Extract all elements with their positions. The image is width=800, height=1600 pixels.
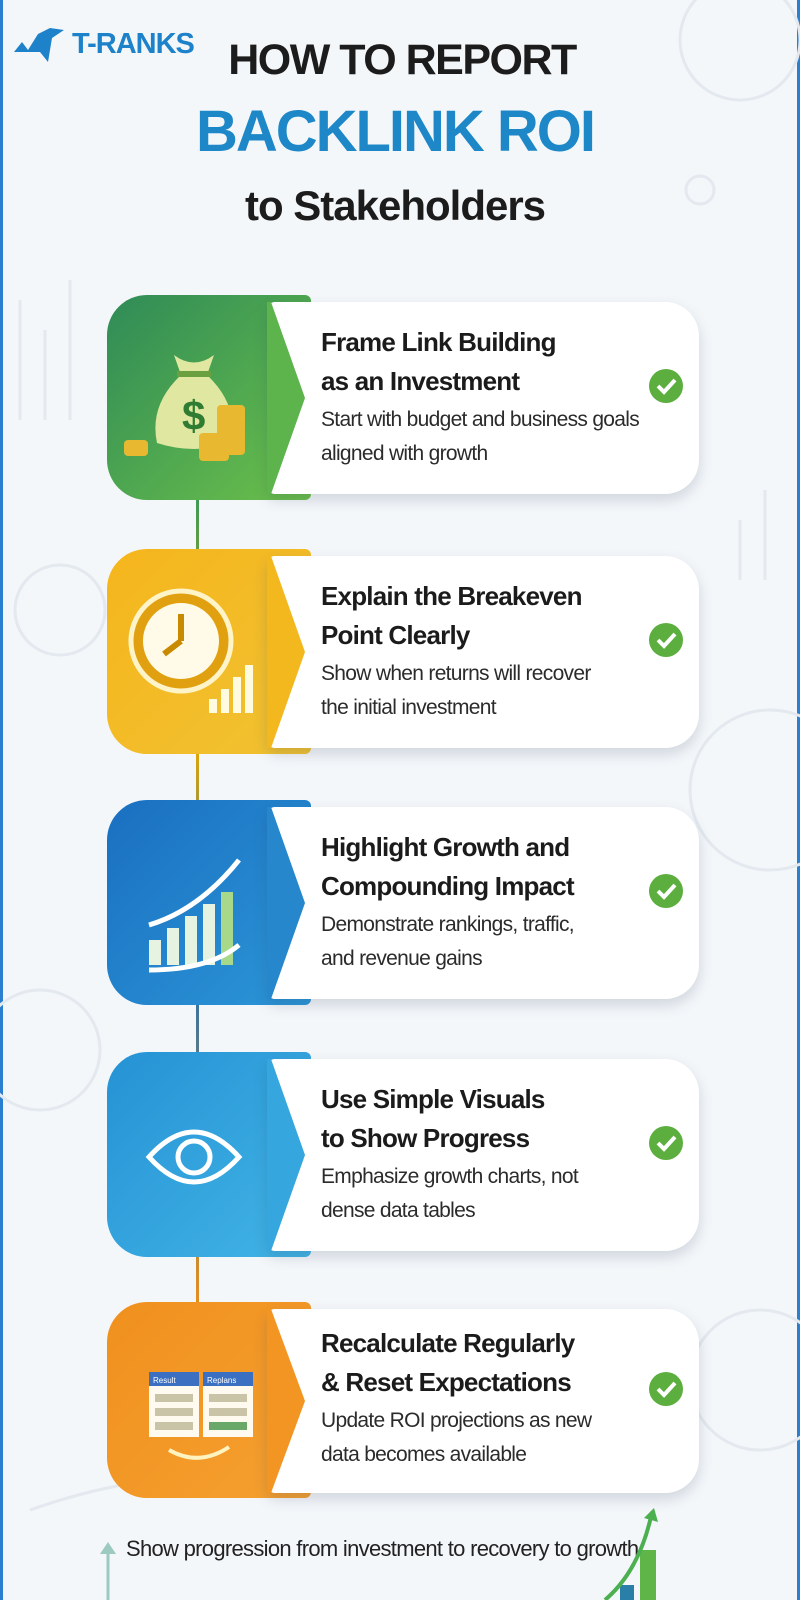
- description: Update ROI projections as new: [321, 1409, 591, 1432]
- title text: Point Clearly: [321, 620, 470, 650]
- title: to Stakeholders: [245, 182, 545, 229]
- icon: money bag: [124, 355, 245, 461]
- icon: check: [649, 1372, 683, 1406]
- title text: [321, 327, 556, 396]
- icon: check: [649, 1126, 683, 1160]
- description: data becomes available: [321, 1443, 526, 1466]
- icon: small arrow: [100, 1542, 116, 1600]
- title text: & Reset Expectations: [321, 1367, 571, 1397]
- description: Emphasize growth charts, not: [321, 1165, 578, 1188]
- title: BACKLINK ROI: [196, 99, 594, 164]
- title text: [321, 1084, 545, 1153]
- icon: check: [649, 874, 683, 908]
- card 2: Breakeven: [107, 549, 704, 760]
- title text: to Show Progress: [321, 1123, 529, 1153]
- title text: Explain the Breakeven: [321, 581, 582, 611]
- logo: T-RANKS: [72, 28, 194, 60]
- icon: eye: [146, 1130, 242, 1184]
- card 3: Growth: [107, 800, 704, 1010]
- title text: as an Investment: [321, 366, 519, 396]
- title text: Recalculate Regularly: [321, 1328, 574, 1358]
- description: Show when returns will recover: [321, 662, 591, 685]
- description: [321, 408, 639, 465]
- description: dense data tables: [321, 1199, 475, 1222]
- icon: calendars: Replans: [207, 1376, 236, 1385]
- footer text: Show progression from investment to recovery to growth: [126, 1536, 638, 1561]
- connector line: [196, 500, 199, 1310]
- description: the initial investment: [321, 696, 496, 719]
- description: Demonstrate rankings, traffic,: [321, 913, 574, 936]
- title text: Use Simple Visuals: [321, 1084, 545, 1114]
- description: [321, 1165, 579, 1222]
- icon: calendars: [149, 1372, 253, 1460]
- description: and revenue gains: [321, 947, 482, 970]
- icon: check: [649, 623, 683, 657]
- title text: Frame Link Building: [321, 327, 556, 357]
- icon: money bag: $: [182, 392, 205, 439]
- card 5: Recalculate: [107, 1302, 704, 1504]
- title text: Highlight Growth and: [321, 832, 569, 862]
- icon: clock: [128, 588, 253, 713]
- title text: [321, 832, 574, 901]
- icon: growth arrow: [604, 1508, 658, 1600]
- logo: [14, 28, 194, 62]
- title: HOW TO REPORT: [228, 36, 576, 84]
- description: aligned with growth: [321, 442, 487, 465]
- title text: [321, 1328, 575, 1397]
- title text: [321, 581, 582, 650]
- title text: Compounding Impact: [321, 871, 574, 901]
- icon: check: [649, 369, 683, 403]
- description: Start with budget and business goals: [321, 408, 639, 431]
- title: [196, 36, 594, 229]
- description: [321, 1409, 592, 1466]
- card 4: Simple Visuals: [107, 1052, 704, 1262]
- description: [321, 662, 592, 719]
- icon: calendars: Result: [153, 1376, 176, 1385]
- icon: growth chart: [148, 858, 241, 972]
- description: [321, 913, 574, 970]
- card 1: Frame Link Building: [107, 295, 704, 506]
